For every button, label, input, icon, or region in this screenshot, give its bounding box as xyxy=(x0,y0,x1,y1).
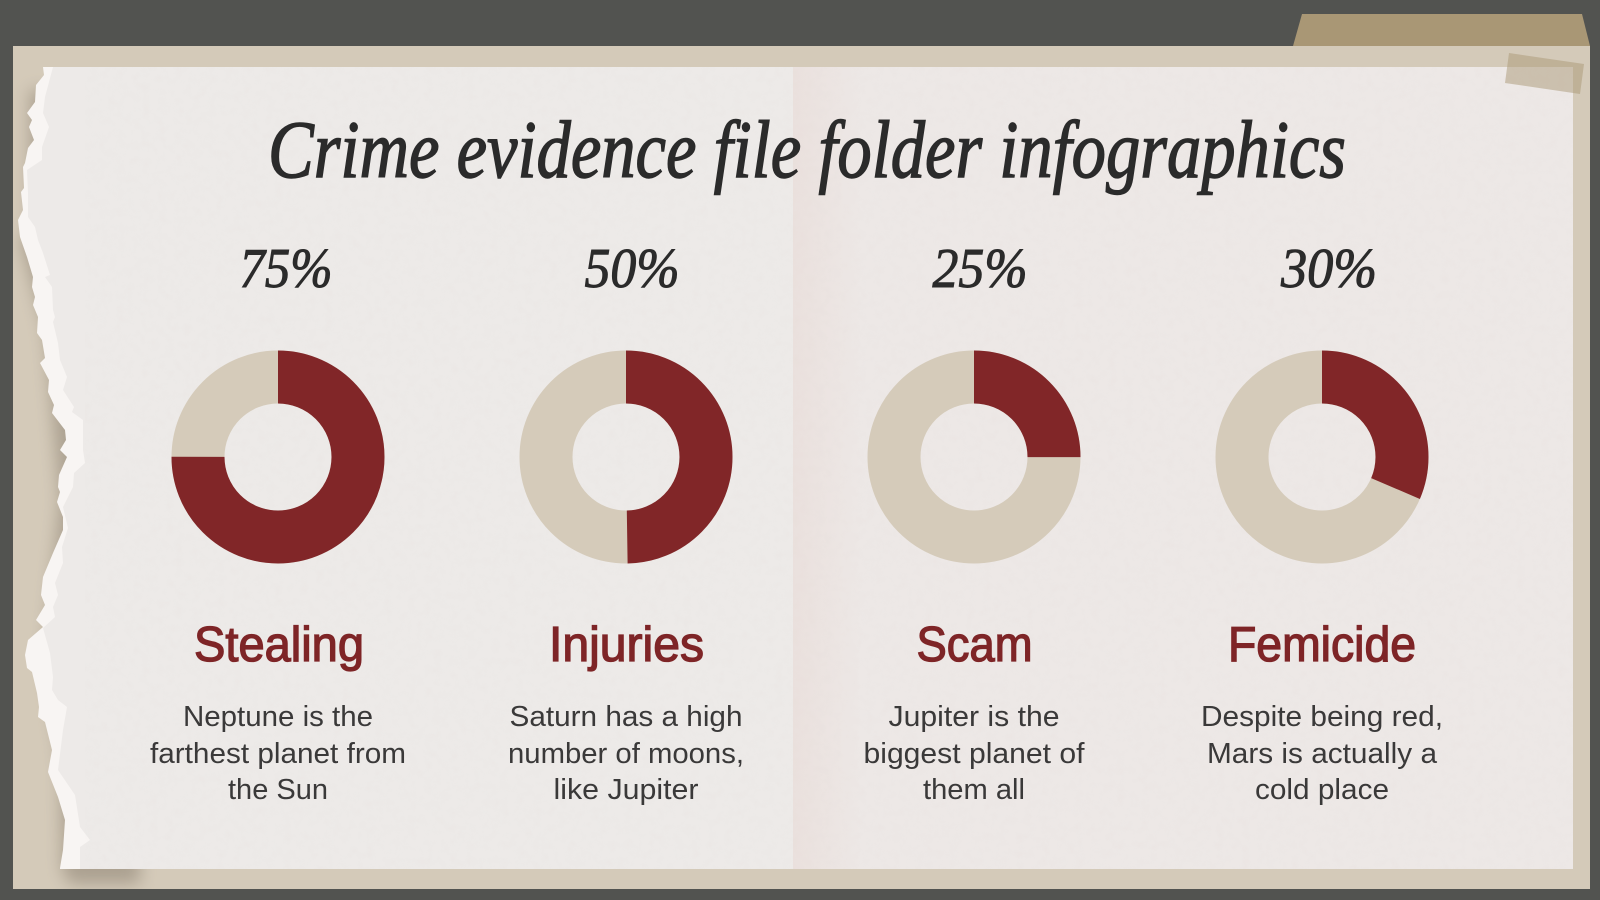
column: Scam xyxy=(864,238,1085,806)
heading: Injuries xyxy=(549,618,704,672)
heading: Scam xyxy=(916,618,1032,672)
title: Crime evidence file folder infographics xyxy=(268,104,1346,195)
percentage 75%: 75% xyxy=(240,238,332,300)
folder tab xyxy=(1293,14,1590,46)
donut chart 30% xyxy=(1242,377,1402,537)
right half tint xyxy=(793,67,1573,869)
centre crease xyxy=(793,67,863,869)
heading: Stealing xyxy=(194,618,364,672)
description xyxy=(1201,701,1443,806)
torn white edge xyxy=(18,67,200,869)
description xyxy=(864,701,1085,806)
description: Saturn has a high xyxy=(510,701,742,733)
description: Despite being red, xyxy=(1201,701,1443,733)
tape xyxy=(1505,53,1584,94)
paper shadow xyxy=(20,90,140,884)
column: Femicide xyxy=(1201,238,1443,806)
column: Stealing xyxy=(150,238,406,806)
percentage 30%: 30% xyxy=(1280,238,1377,300)
description: Jupiter is the xyxy=(888,701,1060,733)
description: the Sun xyxy=(228,774,328,806)
percentage 50%: 50% xyxy=(584,238,680,300)
heading: Femicide xyxy=(1228,618,1416,672)
donut chart 50% xyxy=(546,377,706,537)
donut chart 25% xyxy=(894,377,1054,537)
description: them all xyxy=(923,774,1025,806)
description: Neptune is the xyxy=(183,701,373,733)
column: Injuries xyxy=(508,238,744,806)
description: Mars is actually a xyxy=(1207,738,1438,770)
description: farthest planet from xyxy=(150,738,406,770)
donut chart 75% xyxy=(198,377,358,537)
percentage 25%: 25% xyxy=(932,238,1028,300)
description xyxy=(508,701,744,806)
description: like Jupiter xyxy=(554,774,699,806)
description: biggest planet of xyxy=(864,738,1085,770)
description: number of moons, xyxy=(508,738,744,770)
description: cold place xyxy=(1255,774,1389,806)
description xyxy=(150,701,406,806)
